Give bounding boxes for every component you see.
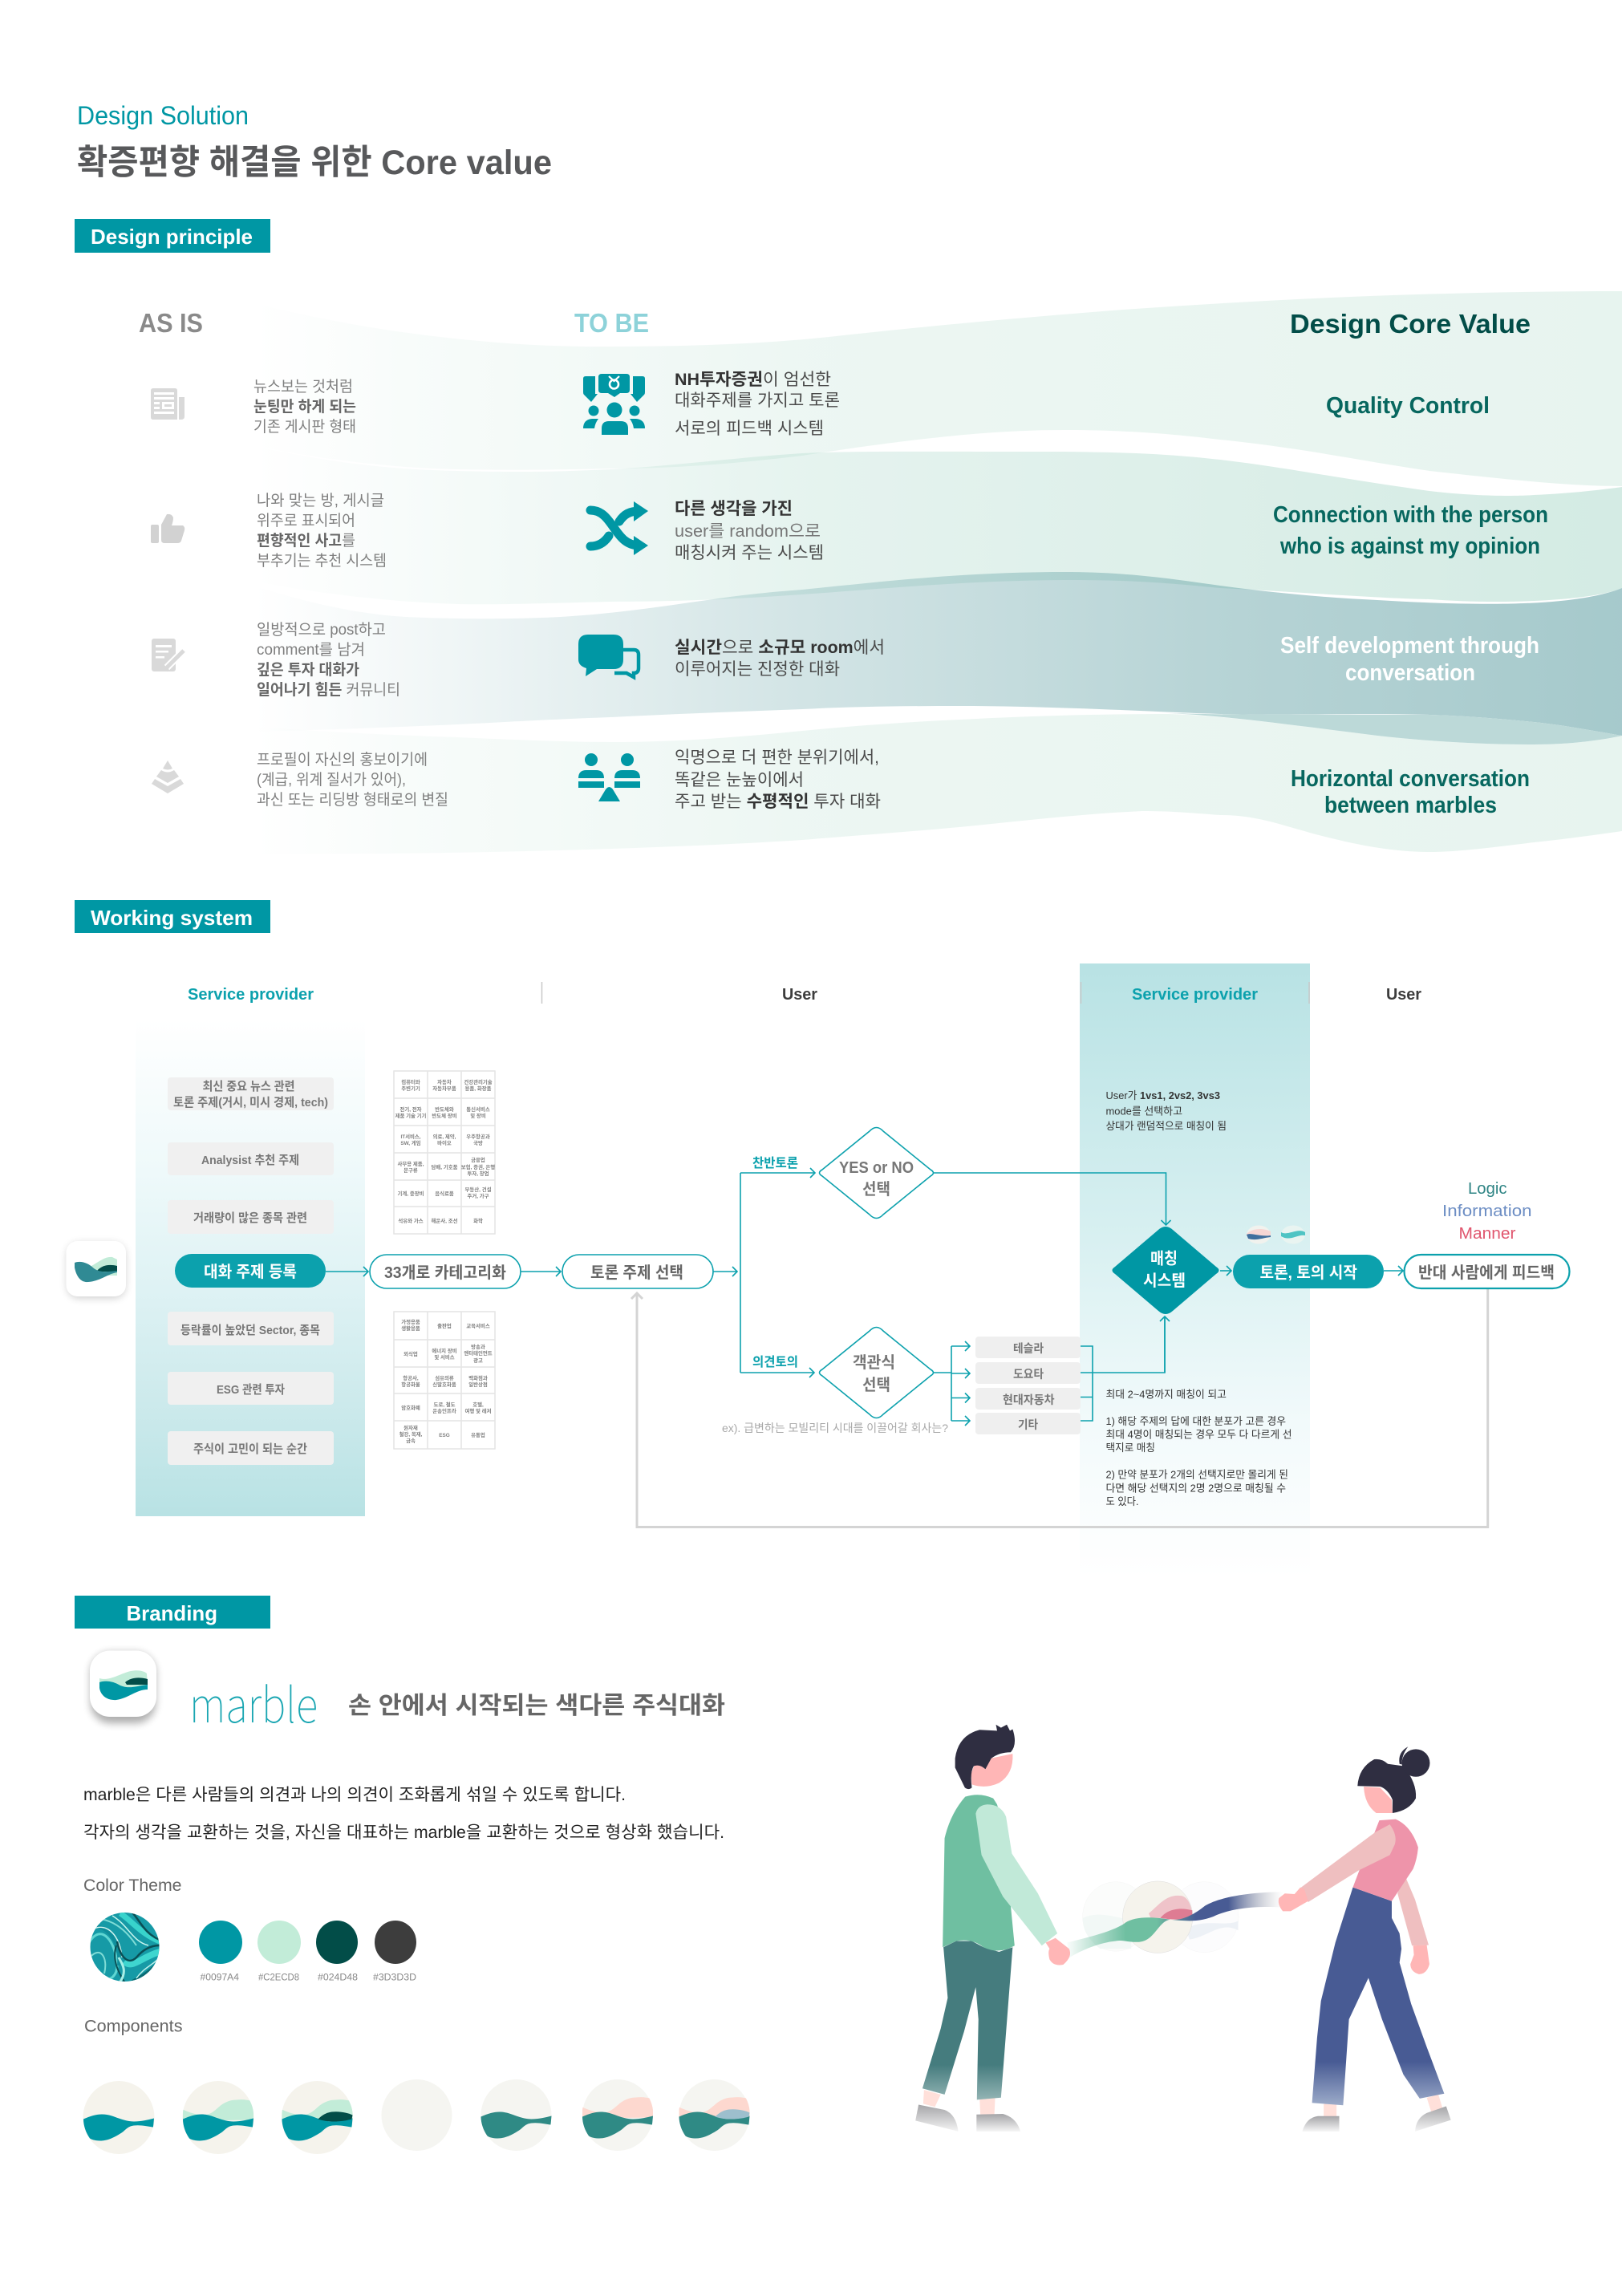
table: categories bottom: 방송과 <box>471 1343 485 1350</box>
table: categories top: 컴퓨터와 <box>401 1078 420 1085</box>
table: categories bottom: 가정용품 <box>401 1318 420 1325</box>
connector: yes or no to matching <box>934 1173 1166 1225</box>
connector: options to matching <box>1081 1316 1165 1421</box>
pill: feedback: 반대 사람에게 피드백 <box>1418 1264 1555 1282</box>
table: categories top: 국방 <box>473 1139 483 1146</box>
option: Toyota <box>975 1362 1081 1384</box>
core value: Horizontal conversation: between marbles <box>1324 793 1497 818</box>
description <box>83 1786 724 1842</box>
wordmark: marble: marble <box>189 1667 318 1737</box>
table: categories top: 반도체 장비 <box>432 1112 457 1119</box>
feedback criteria: Information <box>1442 1203 1532 1220</box>
as-is text 1: 눈팅만 하게 되는 <box>253 398 356 416</box>
table: categories top: 자동차 <box>437 1078 452 1085</box>
table: categories bottom: 생활용품 <box>401 1324 420 1332</box>
topic box: volume: 거래량이 많은 종목 관련 <box>193 1211 307 1225</box>
to-be icon: horizontal peers <box>578 753 640 801</box>
to-be icon: moderated group <box>583 374 645 435</box>
table: categories top: 투자, 창업 <box>467 1170 489 1177</box>
as-is text 3 <box>257 621 400 699</box>
topic box: moment <box>168 1431 334 1465</box>
table: categories top: 문구류 <box>403 1167 418 1174</box>
diamond: yes or no: 선택 <box>862 1180 890 1199</box>
core value: Horizontal conversation <box>1291 766 1530 818</box>
panel: service provider left <box>136 963 365 1516</box>
label: User: User <box>782 986 817 1004</box>
section label: Branding <box>75 1596 270 1629</box>
as-is text 4: 프로필이 자신의 홍보이기에 <box>257 751 428 769</box>
as-is text 3: 일어나기 힘든 커뮤니티 <box>257 681 400 699</box>
as-is text 4 <box>257 751 448 809</box>
table: categories bottom: 암호화폐 <box>401 1404 420 1411</box>
arrows: choice options <box>934 1346 970 1421</box>
note: matching rules: 최대 4명이 매칭되는 경우 모두 다 다르게 선 <box>1105 1428 1292 1441</box>
to-be text 2: 다른 생각을 가진 <box>675 500 793 518</box>
to-be text 2 <box>675 500 824 562</box>
swatch: 024D48 <box>316 1921 358 1983</box>
feedback criteria: Logic <box>1468 1180 1506 1198</box>
note: mode selection: mode를 선택하고 <box>1105 1105 1182 1117</box>
heading: Design Solution: Design Solution <box>77 101 249 130</box>
component marble 3 <box>282 2081 353 2154</box>
table: categories bottom: 일반상점 <box>468 1381 488 1388</box>
table: categories bottom: 교육서비스 <box>466 1322 490 1329</box>
option: Toyota: 도요타 <box>1013 1368 1044 1381</box>
core value: Connection with the person <box>1273 502 1548 559</box>
man <box>915 1725 1070 2132</box>
core value: Self development: Self development through <box>1280 633 1539 659</box>
core value: Horizontal conversation: Horizontal conversation <box>1291 766 1530 792</box>
note: mode selection: 상대가 랜덤적으로 매칭이 됨 <box>1105 1120 1227 1132</box>
pill: register topic: 대화 주제 등록 <box>204 1263 297 1281</box>
table: categories top: 건강관리기술 <box>464 1078 493 1085</box>
table: categories top: 용품, 화장품 <box>465 1085 492 1092</box>
swatch: 0097A4: #0097A4 <box>201 1974 240 1983</box>
table: categories top: 및 장비 <box>470 1112 486 1119</box>
icon: layers <box>152 761 184 793</box>
core value: Self development: conversation <box>1345 660 1475 686</box>
icon: newspaper <box>151 388 185 420</box>
swatch: 024D48: #024D48 <box>318 1974 358 1983</box>
section label: Branding: Branding <box>127 1601 217 1625</box>
table: categories bottom: 호텔, <box>472 1401 484 1408</box>
note: mode selection: User가 1vs1, 2vs2, 3vs3 <box>1105 1089 1220 1101</box>
table: categories bottom: 항공사, <box>403 1374 419 1381</box>
table: categories bottom: 철강, 목재, <box>399 1430 423 1438</box>
pill: register topic <box>175 1254 326 1288</box>
topic box: news: 토론 주제(거시, 미시 경제, tech) <box>173 1096 328 1109</box>
option: other <box>975 1413 1081 1434</box>
as-is text 3: 깊은 투자 대화가 <box>257 661 359 679</box>
topic box: analyst: Analysist 추천 주제 <box>201 1154 299 1167</box>
topic box: volume <box>168 1200 334 1234</box>
arrow: start to feedback <box>1384 1270 1403 1272</box>
branch lines <box>740 1173 815 1373</box>
heading: Design Solution <box>77 101 552 182</box>
as-is text 3: comment를 남겨 <box>257 641 365 659</box>
diamond: yes or no: YES or NO <box>839 1159 914 1177</box>
diamond: matching system: 시스템 <box>1143 1272 1186 1290</box>
table: categories bottom: 금속 <box>406 1437 416 1444</box>
section label: Working system <box>75 900 270 933</box>
icon: marble logo <box>90 1651 156 1723</box>
table: categories bottom: ESG <box>439 1433 450 1438</box>
table: categories top: 주변기기 <box>401 1085 420 1092</box>
column heading: Design Core Value: Design Core Value <box>1290 309 1531 339</box>
to-be text 1: NH투자증권이 엄선한 <box>675 371 831 389</box>
return line <box>631 1288 1488 1527</box>
to-be text 3: 실시간으로 소규모 room에서 <box>675 639 885 657</box>
wave bands background <box>255 291 1622 854</box>
table: categories bottom: 백화점과 <box>468 1374 488 1381</box>
as-is text 2 <box>257 492 387 570</box>
table: categories bottom: 항공화물 <box>401 1381 420 1388</box>
diamond: matching system: 매칭 <box>1150 1250 1178 1268</box>
note: matching rules: 최대 2~4명까지 매칭이 되고 <box>1105 1388 1227 1401</box>
table: categories bottom: 운송인프라 <box>432 1407 456 1414</box>
pill: debate start <box>1233 1255 1384 1288</box>
as-is text 2: 위주로 표시되어 <box>257 512 355 529</box>
section label: Working system: Working system <box>91 906 253 930</box>
table: categories top: 기계, 중장비 <box>398 1190 424 1197</box>
arrows: register to categories to select <box>326 1271 737 1272</box>
note: mode selection <box>1105 1089 1227 1132</box>
to-be text 2: user를 random으로 <box>675 522 821 541</box>
pill: 33 categories: 33개로 카테고리화 <box>384 1264 506 1282</box>
pill: 33 categories <box>370 1255 521 1288</box>
table: categories top <box>394 1071 495 1234</box>
table: categories bottom: 섬유의류 <box>435 1374 454 1381</box>
as-is text 1: 뉴스보는 것처럼 <box>253 378 353 396</box>
icons: two mini marbles <box>1247 1226 1305 1243</box>
note: matching rules: 2) 만약 분포가 2개의 선택지로만 몰리게 된 <box>1105 1468 1288 1481</box>
illustration: two people exchanging marble <box>915 1725 1451 2132</box>
core value: Connection with the person: who is against my opinion <box>1279 533 1540 559</box>
table: categories top: 보험, 증권, 은행 <box>461 1163 495 1170</box>
table: categories top: 부동산, 건설 <box>465 1186 492 1193</box>
topic box: esg: ESG 관련 투자 <box>217 1383 285 1397</box>
table: categories top: 사무용 제품, <box>398 1160 424 1167</box>
topic box: news <box>168 1077 334 1110</box>
section label: Design principle <box>75 219 270 253</box>
pill: debate start: 토론, 토의 시작 <box>1259 1264 1357 1282</box>
to-be text 2: 매칭시켜 주는 시스템 <box>675 544 824 562</box>
to-be text 3: 이루어지는 진정한 대화 <box>675 660 840 679</box>
feedback criteria: Manner <box>1458 1225 1516 1243</box>
topic box: moment: 주식이 고민이 되는 순간 <box>193 1442 307 1456</box>
core value: Self development <box>1280 633 1539 686</box>
column heading: TO BE: TO BE <box>574 308 649 338</box>
description: marble은 다른 사람들의 의견과 나의 의견이 조화롭게 섞일 수 있도록 합니다. <box>83 1786 626 1804</box>
table: categories top: 주거, 가구 <box>467 1192 489 1199</box>
diamond: multiple choice: 선택 <box>862 1376 890 1394</box>
table: categories top: IT서비스, <box>400 1133 421 1140</box>
to-be text 4: 주고 받는 수평적인 투자 대화 <box>675 793 881 811</box>
table: categories bottom: 출판업 <box>437 1322 452 1329</box>
option: other: 기타 <box>1018 1418 1039 1432</box>
diamond: matching system <box>1112 1227 1219 1314</box>
component marble 7 <box>679 2079 749 2151</box>
table: categories top: 통신서비스 <box>466 1105 490 1113</box>
swatch: 0097A4 <box>199 1921 242 1983</box>
to-be text 3 <box>675 639 885 679</box>
swatch: C2ECD8: #C2ECD8 <box>258 1974 299 1983</box>
swatch: 3D3D3D <box>373 1921 416 1983</box>
table: categories bottom: 에너지 장비 <box>432 1347 457 1354</box>
table: categories top: 반도체와 <box>435 1105 454 1113</box>
option: Hyundai <box>975 1388 1081 1410</box>
note: matching rules: 도 있다. <box>1105 1495 1139 1507</box>
panel: service provider left: Service provider <box>188 986 314 1004</box>
pill: feedback <box>1404 1255 1569 1288</box>
pill: select topic <box>562 1255 713 1288</box>
diamond: multiple choice <box>820 1327 934 1418</box>
note: matching rules: 택지로 매칭 <box>1105 1442 1155 1454</box>
as-is text 2: 나와 맞는 방, 게시글 <box>257 492 384 509</box>
note: matching rules <box>1105 1388 1292 1507</box>
feedback criteria <box>1442 1180 1532 1243</box>
as-is text 3: 일방적으로 post하고 <box>257 621 386 639</box>
diamond: yes or no <box>820 1128 934 1218</box>
woman <box>1279 1746 1451 2132</box>
table: categories top: 우주항공과 <box>466 1133 490 1140</box>
table: categories top: 음식료품 <box>435 1190 454 1197</box>
topic box: sector: 등락률이 높았던 Sector, 종목 <box>180 1324 320 1337</box>
table: categories top: 담배, 기호품 <box>432 1163 458 1170</box>
as-is text 2: 편향적인 사고를 <box>257 532 355 550</box>
marble texture swatch <box>90 1913 160 1982</box>
icon: edit note <box>152 639 184 671</box>
title: 확증편향 해결을 위한 Core value <box>77 144 552 182</box>
table: categories top: SW, 게임 <box>400 1139 421 1146</box>
component marble 4 <box>382 2079 452 2151</box>
component marble 1 <box>83 2081 154 2154</box>
section label: Design principle: Design principle <box>91 225 253 249</box>
note: matching rules: 다면 해당 선택지의 2명 2명으로 매칭될 수 <box>1105 1483 1286 1494</box>
as-is text 4: (계급, 위계 질서가 있어), <box>257 771 406 789</box>
pill: select topic: 토론 주제 선택 <box>590 1264 683 1282</box>
heading: Components: Components <box>84 2017 183 2036</box>
label: User right: User <box>1386 986 1421 1004</box>
to-be text 4 <box>675 748 881 811</box>
as-is text 1 <box>253 378 356 436</box>
icon: thumbs up <box>151 514 185 543</box>
table: categories bottom: 유통업 <box>471 1431 485 1438</box>
table: categories top: 바이오 <box>437 1139 452 1146</box>
table: categories top: 제품 기술 기기 <box>395 1112 427 1119</box>
topic box: analyst <box>168 1142 334 1175</box>
to-be icon: shuffle arrows <box>590 501 648 555</box>
option: Tesla <box>975 1337 1081 1358</box>
table: categories bottom: 여행 및 레저 <box>465 1407 492 1414</box>
topic box: esg <box>168 1372 334 1405</box>
table: categories top: 금융업 <box>471 1156 485 1163</box>
topic box: sector <box>168 1312 334 1345</box>
core value: Connection with the person: Connection with the person <box>1273 502 1548 528</box>
to-be icon: chat bubbles <box>578 635 639 677</box>
table: categories top: 의료, 제약, <box>433 1133 456 1140</box>
to-be text 1: 대화주제를 가지고 토론 <box>675 391 840 410</box>
label: discussion: 의견토의 <box>752 1355 798 1369</box>
table: categories top: 해운사, 조선 <box>432 1217 458 1224</box>
as-is text 2: 부추기는 추천 시스템 <box>257 552 387 570</box>
table: categories top: 전기, 전자 <box>399 1105 422 1113</box>
diamond: multiple choice: 객관식 <box>853 1353 895 1372</box>
table: categories bottom: 원자재 <box>403 1424 418 1431</box>
table: categories top: 자동차부품 <box>432 1085 456 1092</box>
table: categories bottom <box>394 1312 495 1449</box>
panel: service provider right <box>1080 963 1310 1577</box>
table: categories top: 석유와 가스 <box>398 1217 424 1224</box>
heading: Color Theme: Color Theme <box>83 1876 181 1895</box>
description: 각자의 생각을 교환하는 것을, 자신을 대표하는 marble을 교환하는 것으로 형상화 했습니다. <box>83 1823 724 1842</box>
note: matching rules: 1) 해당 주제의 답에 대한 분포가 고른 경우 <box>1105 1415 1286 1427</box>
swatch: C2ECD8 <box>257 1921 301 1983</box>
option: Hyundai: 현대자동차 <box>1003 1393 1055 1407</box>
component marble 6 <box>582 2079 653 2151</box>
to-be text 1: 서로의 피드백 시스템 <box>675 420 824 438</box>
table: categories bottom: 및 서비스 <box>434 1353 455 1361</box>
column dividers <box>542 982 1309 1004</box>
table: categories top: 화학 <box>473 1217 483 1224</box>
to-be text 4: 똑같은 눈높이에서 <box>675 771 804 789</box>
example question: ex). 급변하는 모빌리티 시대를 이끌어갈 회사는? <box>722 1422 948 1434</box>
label: debate: 찬반토론 <box>752 1156 798 1170</box>
to-be text 4: 익명으로 더 편한 분위기에서, <box>675 748 879 767</box>
topic box: news: 최신 중요 뉴스 관련 <box>202 1080 295 1093</box>
table: categories bottom: 외식업 <box>403 1350 418 1357</box>
as-is text 4: 과신 또는 리딩방 형태로의 변질 <box>257 791 448 809</box>
to-be text 1 <box>675 371 840 438</box>
as-is text 1: 기존 게시판 형태 <box>253 418 356 436</box>
table: categories bottom: 신발호화품 <box>432 1381 456 1388</box>
column heading: AS IS: AS IS <box>139 308 203 338</box>
tagline: 손 안에서 시작되는 색다른 주식대화 <box>348 1693 725 1719</box>
option: Tesla: 테슬라 <box>1013 1342 1044 1356</box>
arrow: matching to start <box>1220 1270 1231 1272</box>
table: categories bottom: 광고 <box>473 1357 483 1364</box>
panel: service provider right: Service provider <box>1132 986 1258 1004</box>
component marble 5 <box>481 2079 552 2151</box>
center marbles and ribbon <box>1067 1881 1283 1958</box>
icon: app icon <box>66 1241 126 1298</box>
core value: Quality Control: Quality Control <box>1326 393 1490 419</box>
table: categories bottom: 엔터테인먼트 <box>464 1349 493 1357</box>
component marble 2 <box>183 2081 253 2154</box>
swatch: 3D3D3D: #3D3D3D <box>373 1974 416 1983</box>
table: categories bottom: 도로, 철도 <box>433 1401 456 1408</box>
